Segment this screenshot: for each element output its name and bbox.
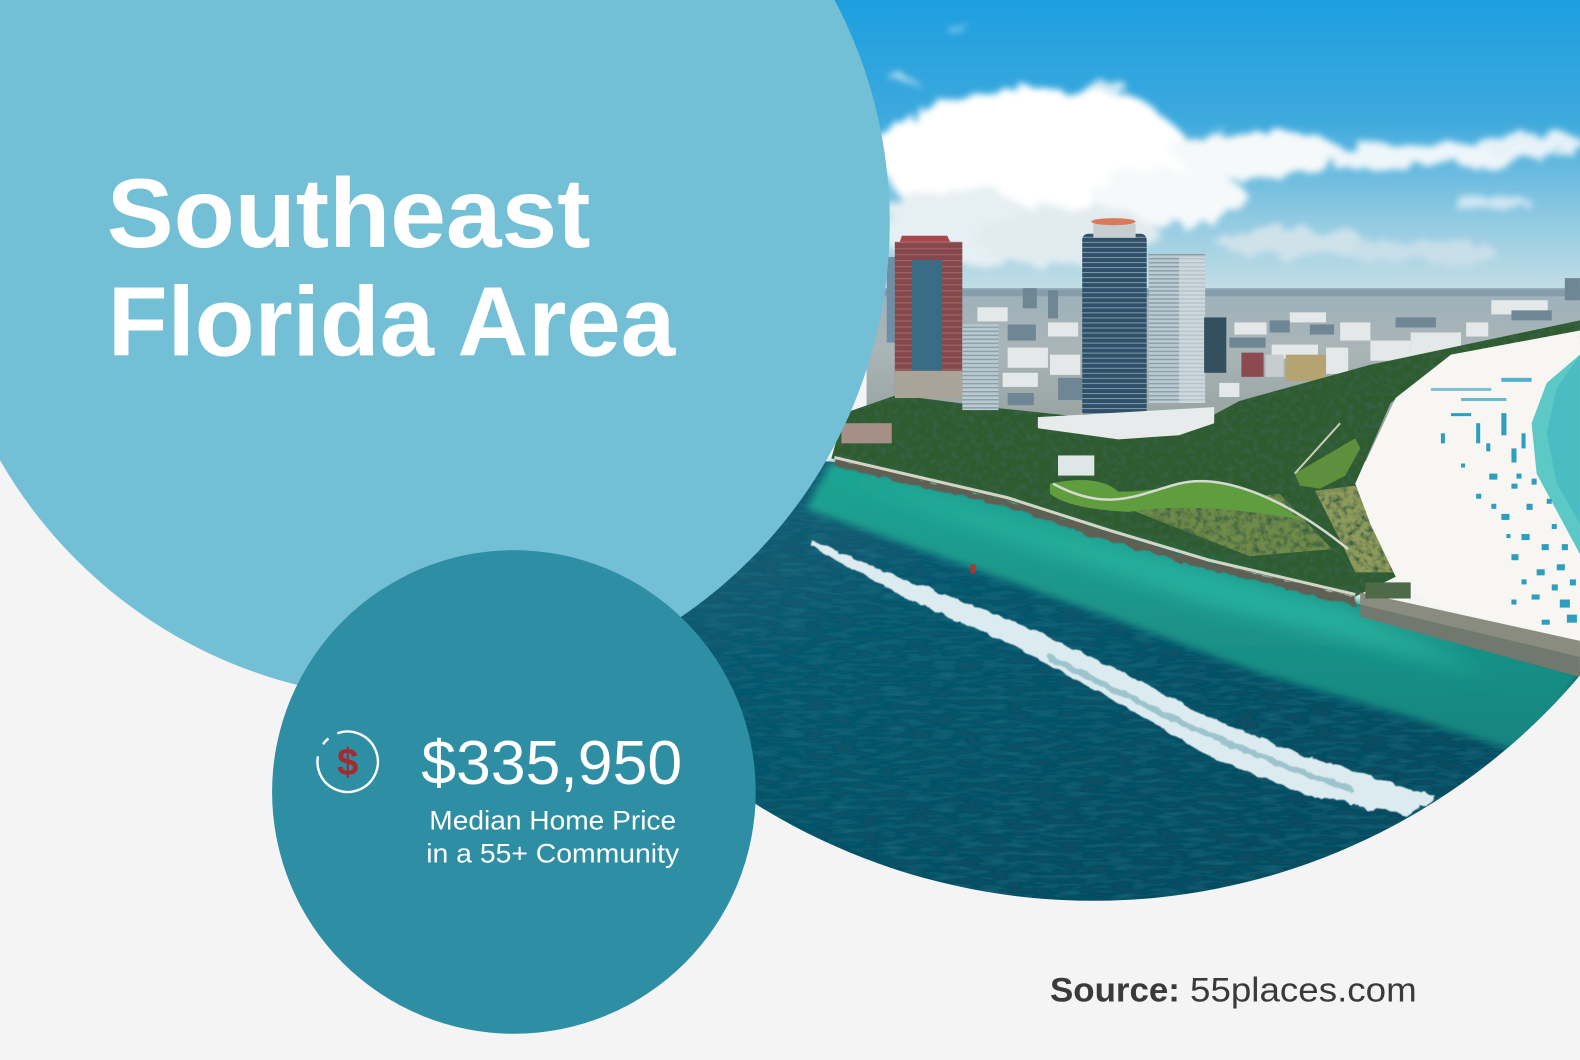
title: Florida Area: [108, 267, 676, 377]
skyscrapers: [887, 218, 1226, 417]
buoy: [970, 564, 975, 573]
source note: 55places.com: [1190, 972, 1417, 1010]
price caption: in a 55+ Community: [426, 838, 680, 869]
title: [107, 158, 676, 377]
icon: dollar in ring: [309, 723, 386, 800]
aerial photo: Miami Beach in circular frame: [443, 0, 1580, 1008]
source note: Source:: [1050, 972, 1180, 1010]
sandy beach: [1355, 330, 1580, 577]
source note: [1050, 972, 1417, 1010]
pier: [1360, 582, 1580, 677]
price caption: Median Home Price: [429, 804, 676, 835]
green park land: [831, 320, 1580, 597]
boat wake: [812, 541, 1436, 816]
clouds: [872, 28, 1580, 267]
low white building: [1038, 407, 1214, 439]
beach umbrellas: [1431, 378, 1577, 625]
price value: $335,950: [421, 728, 682, 798]
shallow sea: [1532, 355, 1580, 554]
sea: deep water: [680, 461, 1580, 901]
turquoise channel: [806, 461, 1580, 756]
city blocks: [867, 278, 1580, 461]
sky: [834, 0, 1580, 290]
price caption: [426, 804, 680, 869]
teal price circle: [272, 550, 756, 1034]
icon: dollar in ring: $: [337, 741, 358, 784]
rocky shore: [834, 461, 1355, 601]
light blue circle: [0, 0, 890, 699]
title: Southeast: [107, 158, 590, 268]
